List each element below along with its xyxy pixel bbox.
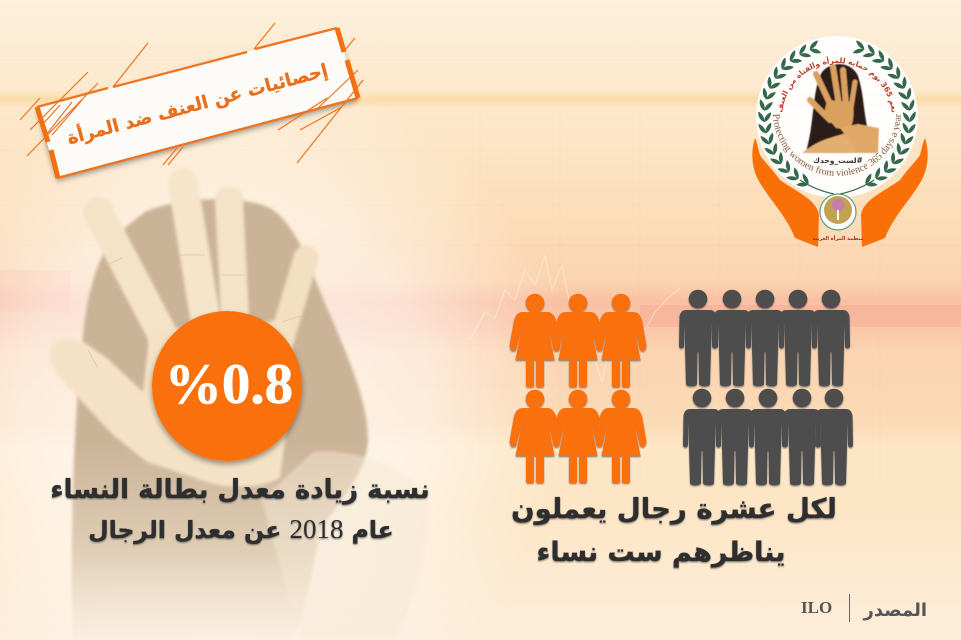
heading: right caption: [511, 493, 837, 568]
logo: right hand: [861, 138, 928, 247]
logo: white disc: [756, 36, 918, 198]
logo: emblem: منظمة المرأة العربية: [812, 235, 864, 242]
heading: left caption: نسبة زيادة معدل بطالة النساء: [50, 475, 430, 505]
heading: left caption: عام 2018 عن معدل الرجال: [88, 514, 394, 544]
stat value: %0.8: [165, 353, 293, 416]
logo: hashtag: #لست_وحدك: [813, 156, 863, 165]
source: ILO: [801, 598, 832, 617]
heading: left caption: [50, 475, 430, 544]
pictogram: men: [679, 290, 853, 485]
logo: photo of hand: [802, 64, 879, 153]
photo: woman raising hand: [50, 183, 428, 640]
logo: left hand: [752, 138, 819, 247]
banner: title: إحصائيات عن العنف ضد المرأة: [64, 58, 330, 149]
banner: title: [20, 23, 363, 178]
logo: emblem: [812, 194, 864, 242]
source: المصدر: [862, 600, 927, 621]
logo: laurel wreath: [756, 38, 918, 194]
pictogram: women: [510, 294, 646, 483]
heading: right caption: يناظرهم ست نساء: [537, 537, 785, 568]
source: [801, 594, 927, 622]
stat circle: [152, 311, 302, 461]
logo: english arc text: Protecting women from violence 365 days a year: [773, 114, 901, 176]
logo: arabic arc text: نعم 365 يوم حماية للمرأة والفتاة من العنف: [778, 56, 896, 112]
heading: right caption: لكل عشرة رجال يعملون: [511, 493, 837, 525]
logo: [752, 36, 928, 247]
